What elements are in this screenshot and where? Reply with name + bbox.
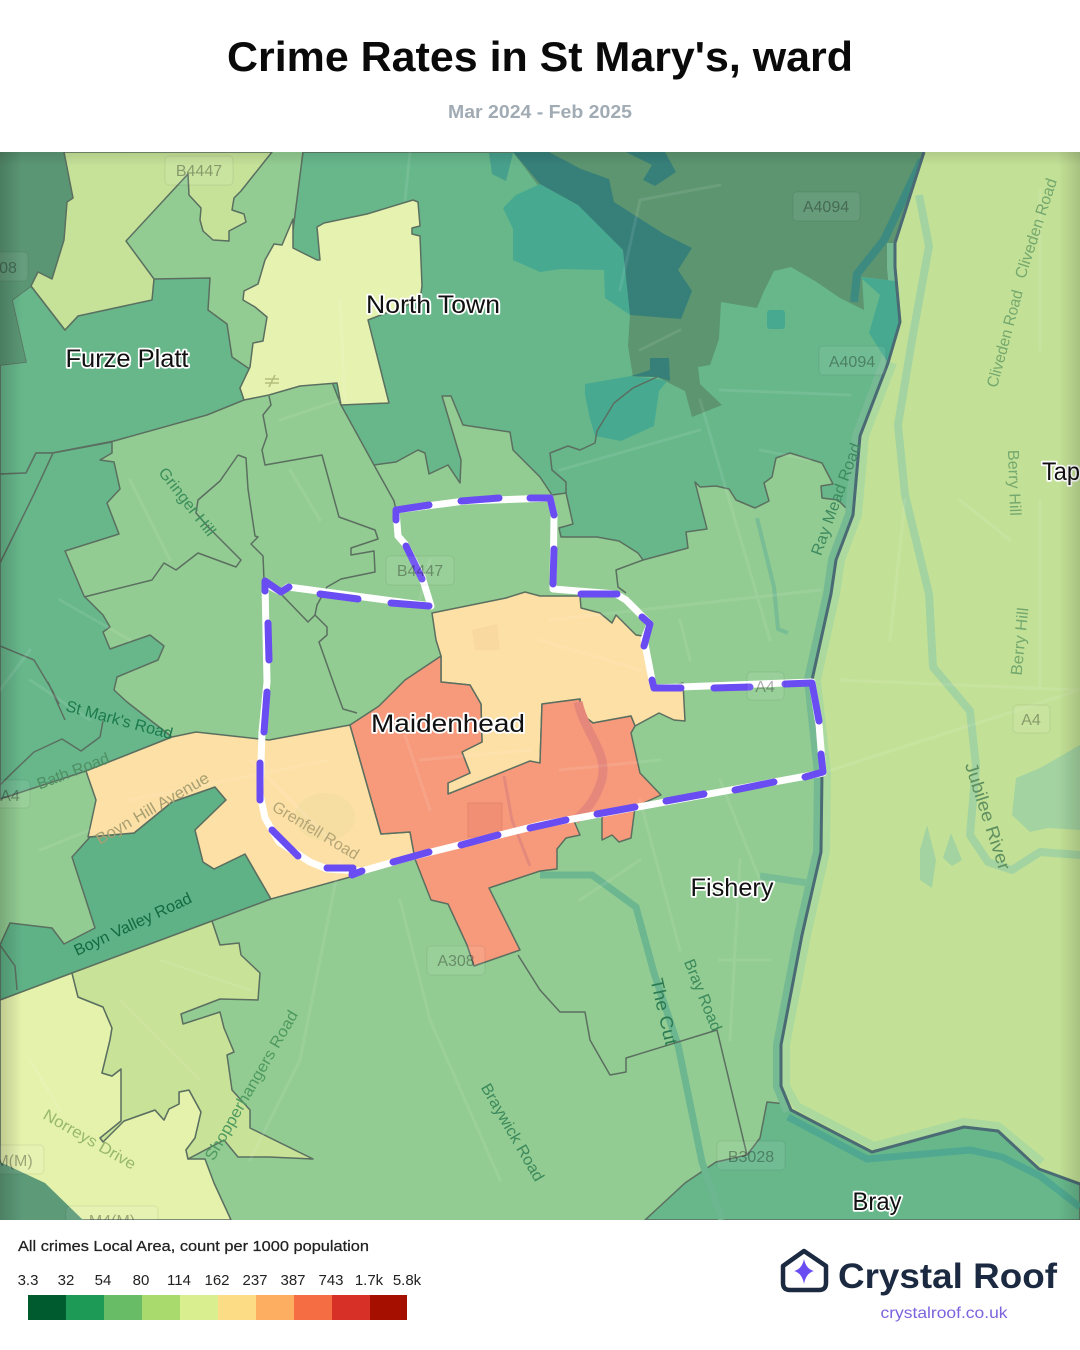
road labels (35, 177, 1061, 1185)
zone: dark grey-green north west (0, 152, 73, 365)
road labels: Berry Hill (1004, 450, 1023, 516)
legend values: 3.3 (18, 1272, 38, 1289)
road labels: Berry Hill (1009, 607, 1033, 676)
subtitle: date range: Mar 2024 - Feb 2025 (448, 102, 632, 122)
river: The Cut (540, 875, 722, 1220)
legend values: 80 (133, 1272, 149, 1289)
legend values: 387 (280, 1272, 306, 1289)
ward boundary: white base line (260, 498, 823, 871)
river teal band Bray (788, 1117, 1080, 1207)
zone: small teal patch north (489, 153, 513, 181)
road number badges: B4447 (176, 163, 222, 180)
river through town (575, 702, 603, 820)
place labels: Bray (852, 1188, 902, 1216)
road labels: Boyn Valley Road (72, 890, 195, 960)
place labels (66, 291, 1080, 1216)
road number badges: B3028 (728, 1149, 774, 1166)
stream west of centre (504, 776, 530, 866)
zone: darker green north-centre (291, 152, 924, 560)
place labels: Fishery (690, 874, 774, 902)
road number badges: B4447 (397, 563, 443, 580)
river band west of the Thames (781, 243, 900, 1110)
zone: south west pale yellow (0, 973, 231, 1220)
lake (1012, 745, 1080, 832)
railway station symbol (265, 375, 279, 387)
road labels: Cliveden Road (985, 288, 1027, 389)
brand logo (783, 1251, 1057, 1322)
road labels: The Cut (646, 976, 681, 1047)
zone: dark green west (0, 442, 172, 799)
zone: east pale green floodplain (781, 152, 1080, 1184)
legend values: 162 (204, 1272, 230, 1289)
legend values: 237 (242, 1272, 268, 1289)
zone: teal patch centre (585, 376, 667, 441)
legend values: 54 (95, 1272, 111, 1289)
legend (18, 1238, 422, 1320)
legend values: 743 (318, 1272, 344, 1289)
pond one (920, 825, 936, 888)
Thames bank (781, 152, 1080, 1184)
road labels: Jubilee River (961, 760, 1015, 872)
zone: darkest north woodland (513, 152, 924, 417)
road labels: Shopperhangers Road (202, 1008, 302, 1164)
river teal branch (860, 277, 900, 363)
road labels: Ray Mead Road (809, 441, 865, 558)
park town centre (472, 624, 500, 650)
river channel north (854, 160, 922, 302)
light band along bank (786, 363, 1042, 1162)
zone: North Town pale yellow (240, 200, 422, 405)
legend values (18, 1272, 422, 1289)
legend values: 114 (167, 1272, 191, 1289)
road labels: Boyn Hill Avenue (93, 770, 213, 848)
legend values: 1.7k (355, 1272, 384, 1289)
zone: south west dark corner (0, 1162, 83, 1220)
road labels: Bray Road (680, 957, 724, 1034)
zone: cream west (86, 725, 415, 899)
zone: dark teal band (513, 152, 692, 319)
place labels: North Town (366, 291, 500, 319)
zone: Bray dark green (645, 1102, 1080, 1220)
road number badges: A4094 (829, 354, 875, 371)
place labels: Maidenhead (371, 710, 525, 738)
ditch south (760, 876, 808, 883)
road labels: Braywick Road (477, 1081, 547, 1185)
legend colour scale (28, 1295, 407, 1320)
road number badges: A308 (437, 953, 475, 970)
road number badges: M4(M) (89, 1213, 135, 1230)
road number badges: A4 (1021, 712, 1041, 729)
icon: house with sparkle (783, 1251, 826, 1290)
wordmark: Crystal Roof (838, 1257, 1057, 1296)
zone: small teal pond (767, 310, 785, 329)
road labels: Norreys Drive (40, 1107, 139, 1174)
zone: teal woodland (503, 184, 630, 315)
map edge shading (0, 152, 1080, 1220)
zone: small dark teal blob (626, 152, 676, 186)
Jubilee River (898, 195, 1080, 870)
park Grenfell (295, 793, 355, 841)
zone: dark teal square (631, 358, 670, 381)
ward boundary: purple dashes (260, 498, 823, 875)
zone: Boyn Valley dark green (0, 787, 271, 1000)
legend title: All crimes Local Area, count per 1000 population (18, 1238, 369, 1255)
zone: dark green Furze Platt (0, 278, 251, 474)
pond two (943, 833, 962, 866)
title: Crime Rates in St Mary's, ward (227, 33, 853, 80)
road labels: Gringer Hill (155, 465, 218, 540)
ditch east (757, 518, 788, 633)
road number badges (0, 156, 1050, 1235)
zone: south west olive (72, 921, 313, 1159)
road labels: Grenfell Road (269, 799, 362, 864)
legend values: 5.8k (393, 1272, 422, 1289)
place labels: Furze Platt (66, 345, 189, 373)
road number badges: A4 (755, 679, 775, 696)
zone boundary: teal edge (550, 377, 657, 493)
road labels: Cliveden Road (1013, 177, 1061, 281)
zone: cream town centre (432, 592, 685, 794)
road number badges: A4094 (803, 199, 849, 216)
zone: salmon town centre (350, 656, 661, 966)
zone boundaries inside medium green (0, 396, 747, 1155)
road number badges: A4 (0, 788, 20, 805)
legend values: 32 (58, 1272, 74, 1289)
zone: pale green north west (31, 152, 272, 330)
road labels: St Mark's Road (64, 698, 174, 743)
road labels: Bath Road (35, 750, 112, 793)
faint road network (0, 152, 1080, 1180)
building block (468, 803, 502, 837)
website: crystalroof.co.uk (880, 1305, 1009, 1322)
